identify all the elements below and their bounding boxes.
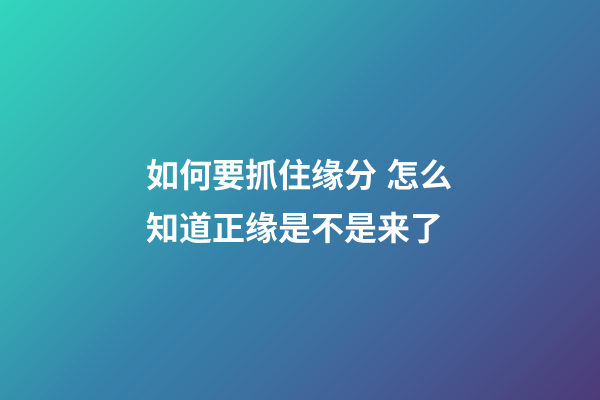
title: 如何要抓住缘分 怎么 bbox=[146, 157, 452, 194]
title bbox=[146, 157, 452, 247]
title: 知道正缘是不是来了 bbox=[146, 210, 443, 247]
